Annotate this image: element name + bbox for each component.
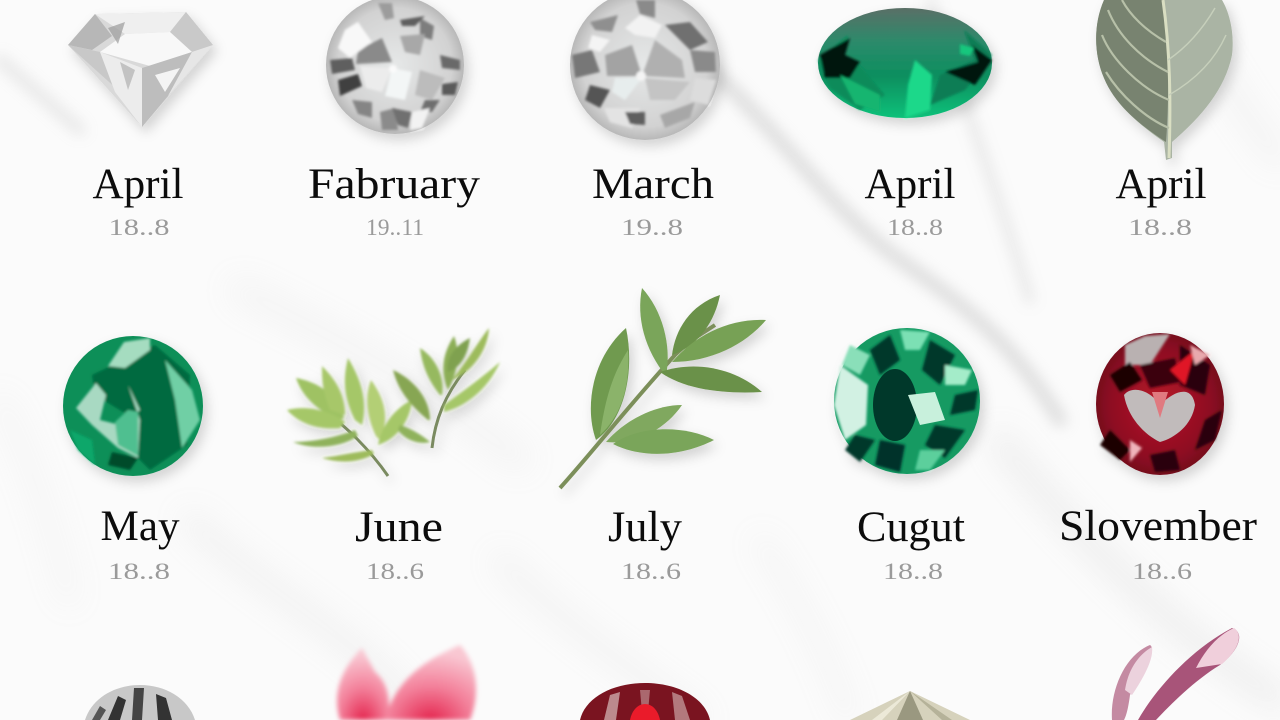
gem: round diamond bbox=[326, 0, 464, 134]
value label: 18..6 bbox=[1132, 559, 1192, 584]
month label: Fabruary: Fabruary bbox=[308, 161, 481, 208]
value label: 18..8 bbox=[887, 215, 943, 240]
gem: partial diamond bbox=[85, 685, 195, 720]
month label: Cugut: Cugut bbox=[857, 504, 965, 551]
value label: 18..6 bbox=[621, 559, 681, 584]
value label: 18..8 bbox=[883, 559, 943, 584]
leaf: small green sprig bbox=[287, 328, 500, 476]
gem: partial pale diamond bbox=[850, 691, 970, 720]
flower: pink stalks bbox=[1112, 628, 1239, 720]
gem: diamond side view bbox=[68, 12, 213, 127]
month label: July: July bbox=[608, 504, 683, 551]
value label: 18..6 bbox=[366, 559, 424, 584]
gem: faceted emerald bbox=[63, 336, 203, 476]
value label: 18..8 bbox=[108, 559, 170, 584]
leaf: olive branch bbox=[560, 288, 766, 488]
gem: round brilliant bbox=[570, 0, 720, 140]
gem: ruby with heart bbox=[1096, 333, 1224, 475]
value label: 18..8 bbox=[1128, 215, 1192, 240]
month label: Slovember: Slovember bbox=[1059, 503, 1257, 550]
gem: oval emerald bbox=[818, 8, 992, 118]
flower: pink petals bbox=[337, 645, 476, 720]
gem: partial ruby bbox=[580, 683, 710, 720]
value label: 19..11 bbox=[366, 215, 424, 240]
value label: 19..8 bbox=[621, 215, 683, 240]
month label: April: April bbox=[864, 161, 956, 208]
gem: green brilliant bbox=[834, 328, 980, 474]
month label: June: June bbox=[355, 504, 443, 551]
month label: April: April bbox=[92, 161, 184, 208]
month label: April: April bbox=[1116, 161, 1207, 208]
month label: May: May bbox=[100, 503, 180, 550]
leaf: large veined leaf bbox=[1096, 0, 1233, 160]
month label: March: March bbox=[592, 161, 714, 208]
value label: 18..8 bbox=[108, 215, 170, 240]
